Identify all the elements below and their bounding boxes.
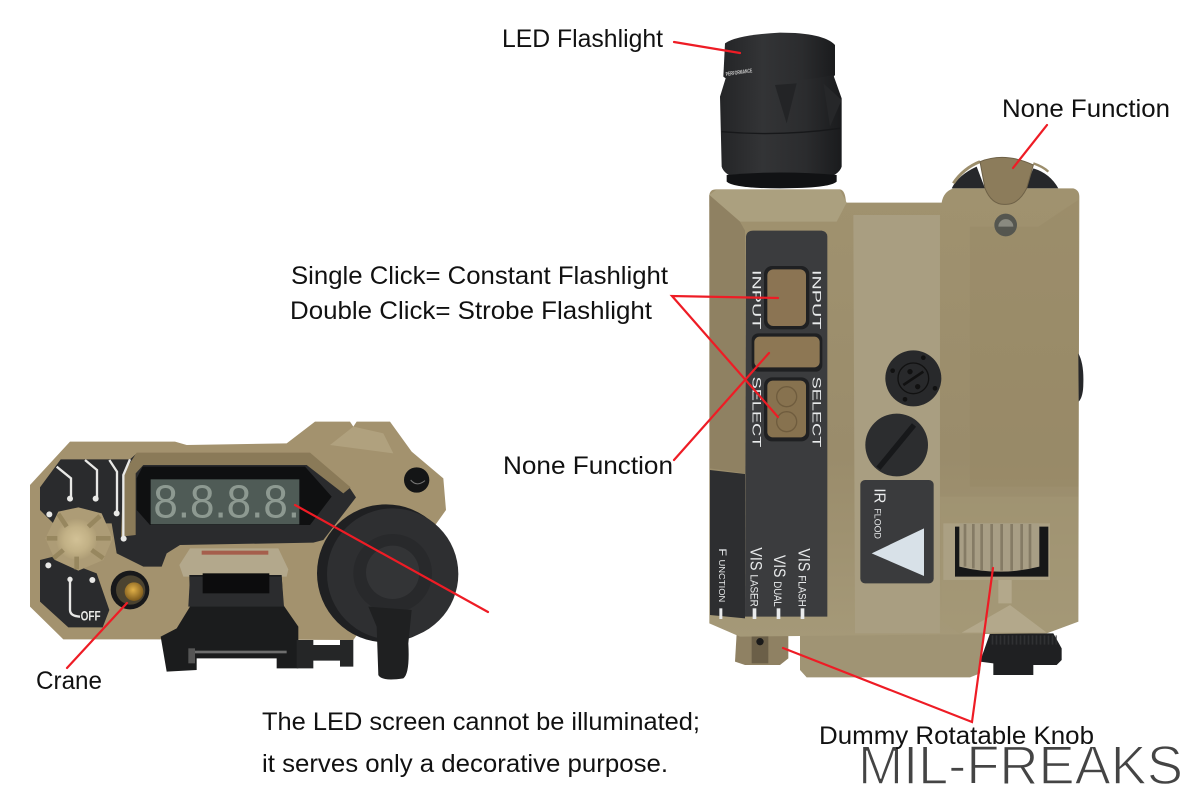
select label left: SELECT xyxy=(750,377,764,448)
side wheel with cap xyxy=(317,504,458,679)
panel markings xyxy=(57,459,130,617)
leader lines: click buttons xyxy=(672,296,778,417)
long select button xyxy=(752,333,822,372)
input label right: INPUT xyxy=(809,270,823,330)
label: dummy rotatable knob: Dummy Rotatable Knob xyxy=(819,722,1094,750)
label: single click: Single Click= Constant Flashlight xyxy=(291,262,668,290)
display window xyxy=(137,467,332,525)
lower left panel xyxy=(40,557,109,627)
top fin xyxy=(980,157,1033,204)
side button xyxy=(1078,353,1083,402)
screw xyxy=(994,214,1017,236)
wheel frame xyxy=(943,523,1050,580)
input button xyxy=(764,266,809,329)
input label left: INPUT xyxy=(749,270,763,330)
label: top none function: None Function xyxy=(1002,95,1170,123)
IR flood panel: IR xyxy=(871,488,888,503)
slotted battery cap xyxy=(865,414,928,476)
mode labels: VIS DUAL xyxy=(770,555,789,607)
brass crane screw xyxy=(111,571,149,609)
round knob with screws xyxy=(885,350,941,406)
device: top view with LED screen xyxy=(30,422,458,679)
note: LED screen: it serves only a decorative purpose. xyxy=(262,750,668,778)
leader line: middle none function xyxy=(674,353,769,460)
lower bevel xyxy=(962,605,1047,633)
leader lines: dummy knob xyxy=(783,568,993,722)
right panel xyxy=(970,200,1078,487)
note: LED screen: The LED screen cannot be illuminated; xyxy=(262,708,700,736)
display digits: 8.8.8.8. xyxy=(153,476,300,528)
wheel stem xyxy=(998,580,1012,603)
label: middle none function: None Function xyxy=(503,452,673,480)
label: double click: Double Click= Strobe Flashlight xyxy=(290,297,652,325)
left strip xyxy=(709,195,745,473)
selector knob xyxy=(45,507,113,571)
leader line: LED screen xyxy=(295,505,488,612)
black control panel xyxy=(40,453,356,567)
lower rail block xyxy=(800,633,983,677)
device body xyxy=(30,422,446,640)
main housing xyxy=(709,188,1079,637)
label: crane: Crane xyxy=(36,667,102,695)
corner screw xyxy=(404,467,429,493)
lower section xyxy=(940,497,1078,633)
rail mount xyxy=(161,573,353,672)
watermark: MIL-FREAKS xyxy=(858,734,1183,796)
mode labels: F UNCTION xyxy=(716,548,728,603)
dummy rotatable knob stub xyxy=(735,633,788,665)
top dial xyxy=(952,162,1058,188)
mode labels xyxy=(716,547,813,619)
select label right: SELECT xyxy=(809,377,823,448)
label: LED flashlight: LED Flashlight xyxy=(502,25,663,53)
button panel xyxy=(745,231,827,617)
top bevel xyxy=(709,190,847,222)
note: LED screen xyxy=(262,708,700,778)
mode labels: VIS FLASH xyxy=(794,548,813,607)
OFF label: OFF xyxy=(81,608,101,624)
mode labels: VIS LASER xyxy=(747,547,766,607)
leader line: LED flashlight xyxy=(674,42,740,53)
thumb wheel xyxy=(955,523,1048,577)
IR flood panel: FLOOD xyxy=(872,508,882,539)
flashlight head: PERFORMANCE xyxy=(725,68,753,78)
raised display lip xyxy=(121,453,351,537)
flashlight head xyxy=(720,33,842,188)
center panel xyxy=(853,215,940,633)
select button with circles xyxy=(764,377,809,441)
left dark strip xyxy=(710,470,745,618)
IR flood panel xyxy=(860,480,934,583)
leader line: crane xyxy=(67,603,127,668)
bottom wheel xyxy=(980,633,1062,675)
device: side view with flashlight xyxy=(709,33,1083,677)
leader line: top none function xyxy=(1013,125,1047,168)
clear window xyxy=(179,548,288,577)
